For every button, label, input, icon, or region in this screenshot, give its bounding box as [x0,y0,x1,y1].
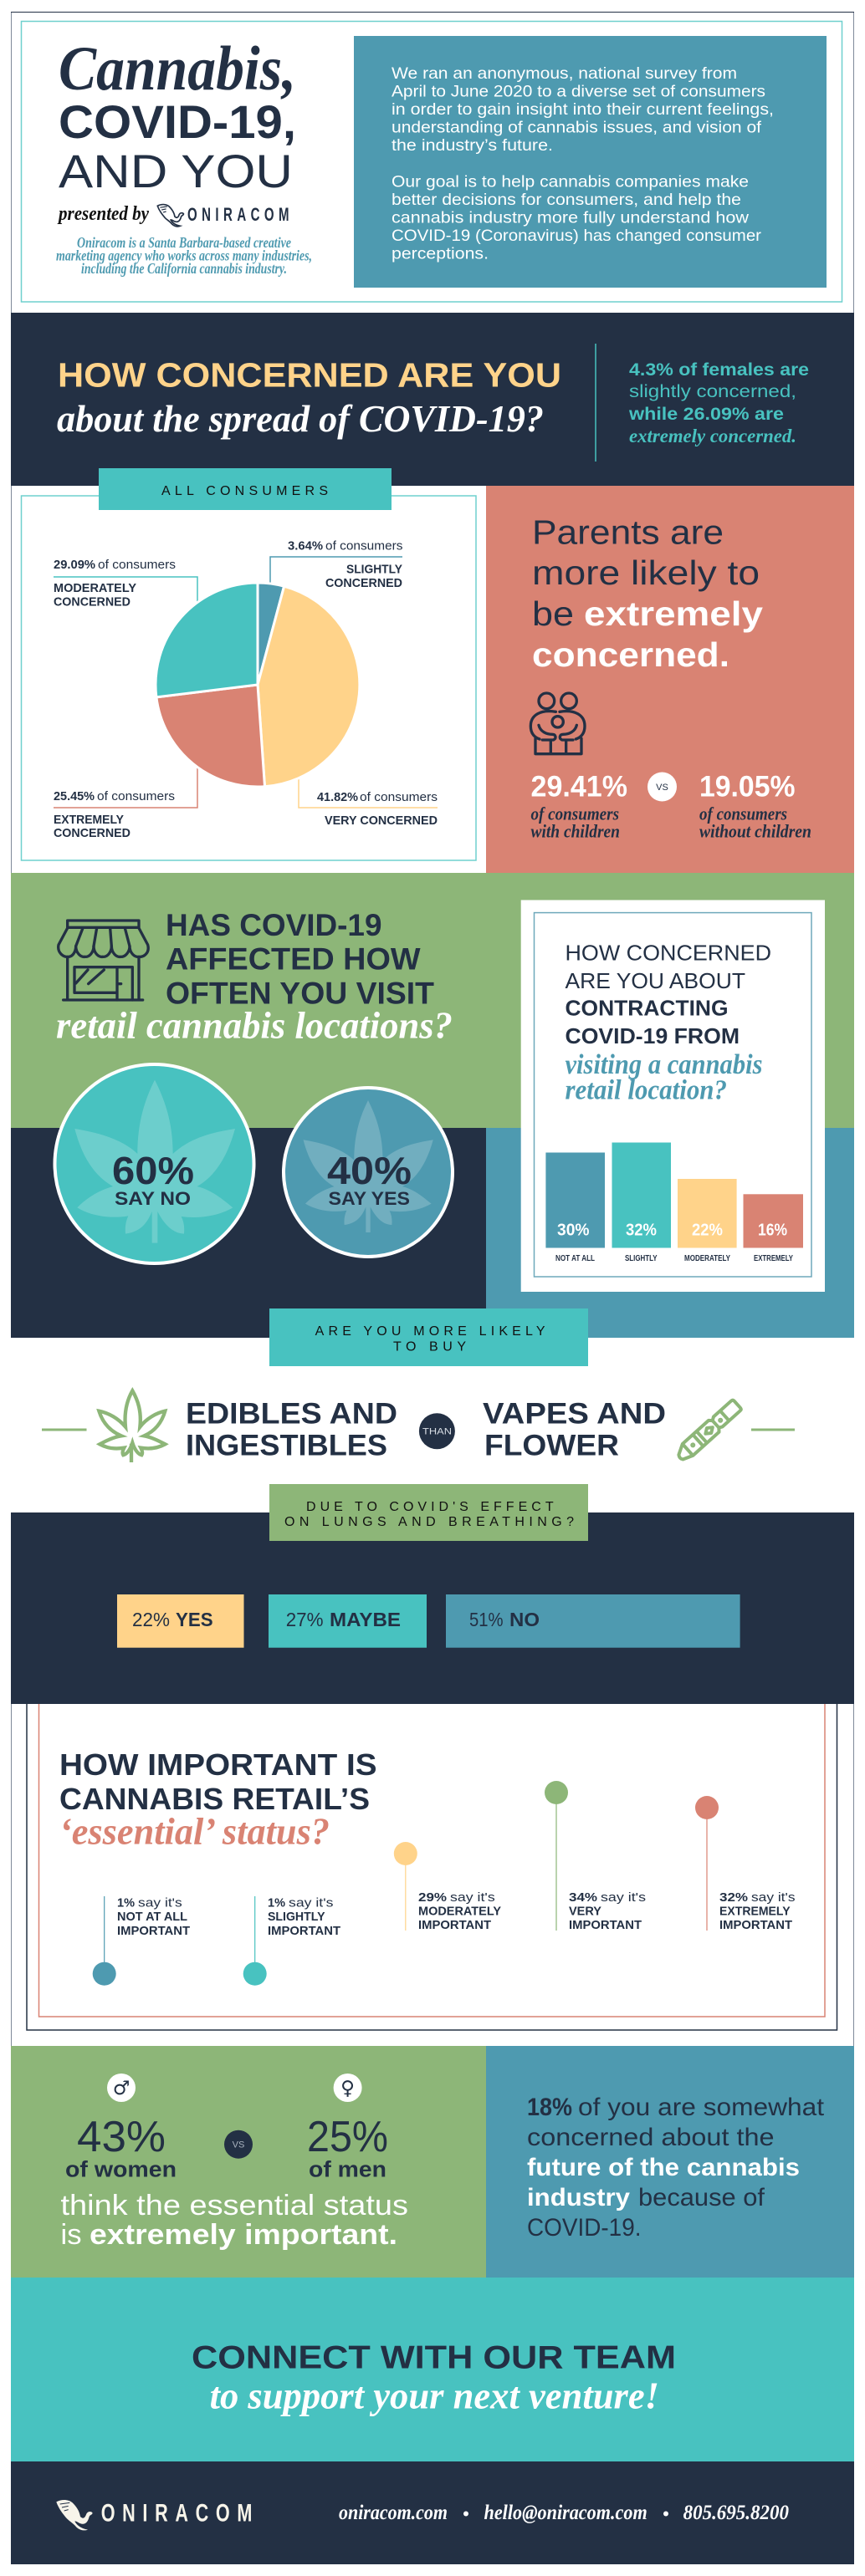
callout: extremely concerned [54,765,197,840]
essential status statement: is [60,2219,82,2251]
bar chart [545,1142,803,1263]
heading: HOW CONCERNED ARE YOU [58,356,561,395]
female concern callout: slightly concerned, [629,382,796,401]
female concern callout: 4.3% of females are [629,360,809,380]
lollipop: moderately important: IMPORTANT [418,1918,491,1932]
stat: men [307,2113,388,2182]
than badge: THAN [422,1426,452,1436]
bar chart: NOT AT ALL [555,1254,595,1263]
panel: future of the industry: of you are somewhat [578,2094,825,2121]
lollipop: extremely important: EXTREMELY [719,1905,791,1919]
callout: moderately concerned [54,558,197,610]
parents heading: more likely to [532,553,760,592]
lollipop: not at all important: say it's [138,1896,182,1910]
vs badge [224,2130,253,2159]
vs badge: VS [656,783,668,793]
lollipop: very important: VERY [569,1905,601,1919]
panel: women vs men [11,2046,486,2278]
callout: moderately concerned: MODERATELY [54,581,136,595]
lollipop: extremely important [695,1796,795,1932]
title: Cannabis, [59,34,296,104]
panel: call to action: CONNECT WITH OUR TEAM [192,2339,676,2376]
callout: very concerned: VERY CONCERNED [325,814,438,828]
callout: moderately concerned: CONCERNED [54,595,131,610]
footer logo: ONIRACOM [101,2500,259,2528]
card heading: retail location? [566,1075,727,1106]
icon: female symbol: ♀ [340,2078,355,2099]
bar: 51% no: 51% [469,1609,504,1630]
callout: moderately concerned: 29.09% [54,558,95,572]
lollipop: slightly important: IMPORTANT [268,1924,340,1938]
stat: with children: 29.41% [530,771,627,803]
stat: men: of men [309,2157,386,2182]
header panel [22,22,842,302]
option: edibles and ingestibles [186,1398,397,1462]
question tab: DUE TO COVID'S EFFECT [306,1500,554,1514]
card heading: visiting a cannabis [566,1049,763,1080]
vs badge [647,773,677,801]
heading: AFFECTED HOW [166,942,421,977]
panel: more likely to buy [11,1308,854,1512]
lollipop: not at all important: IMPORTANT [117,1924,190,1938]
lollipop: extremely important: IMPORTANT [719,1918,792,1932]
parents heading: concerned. [532,635,729,674]
presented by logo [57,203,294,227]
bar chart: EXTREMELY [754,1254,793,1263]
callout: extremely concerned: of consumers [97,789,175,803]
intro text box: in order to gain insight into their current feelings, [392,100,774,119]
panel: all consumers pie [22,468,476,860]
parents heading: be [532,594,574,633]
intro text box: cannabis industry more fully understand how [392,209,750,227]
question tab: ARE YOU MORE LIKELY [315,1324,545,1339]
question tab: ON LUNGS AND BREATHING? [284,1515,574,1529]
intro text box: better decisions for consumers, and help the [392,191,741,209]
heading: HAS COVID-19 [166,908,381,942]
lollipop: very important: 34% [569,1890,597,1905]
female concern callout [628,360,809,446]
essential status statement [60,2190,408,2251]
stat circle: 60% say no: SAY NO [115,1188,191,1209]
callout: slightly concerned: 3.64% [288,539,323,553]
parents heading: Parents are [532,513,724,552]
icon: joint [674,1399,743,1463]
icon: male symbol [107,2074,136,2102]
lollipop: very important: say it's [601,1890,646,1905]
intro text box: perceptions. [392,244,489,263]
stat circle: 40% say yes [284,1088,453,1257]
panel: future of the industry: concerned about the [527,2124,775,2151]
contact details: 805.695.8200 [683,2502,789,2524]
lollipop: moderately important [394,1842,501,1932]
panel: future of the industry: 18% [527,2094,572,2121]
contact details: oniracom.com [339,2502,448,2524]
callout: slightly concerned [270,539,403,590]
bar chart: MODERATELY [684,1254,730,1263]
lollipop: moderately important: MODERATELY [418,1905,501,1919]
title: AND YOU [59,145,293,197]
panel: call to action: to support your next venture! [210,2375,659,2417]
intro text box: the industry’s future. [392,136,553,155]
heading [56,908,453,1047]
panel: call to action [11,2278,854,2461]
bar chart: 16% [758,1221,787,1239]
lollipop: moderately important: 29% [418,1890,447,1905]
contact details [339,2502,789,2524]
callout: very concerned [299,778,438,828]
card heading: CONTRACTING [566,996,728,1021]
parents heading: extremely [584,594,763,633]
lollipop: slightly important: 1% [268,1896,285,1910]
stat circle: 60% say no [55,1064,254,1263]
lollipop: slightly important [243,1896,340,1986]
callout: slightly concerned: SLIGHTLY [346,563,402,577]
lollipop: very important: IMPORTANT [569,1918,642,1932]
panel: future of the industry: future of the cannabis [527,2154,800,2181]
parents heading [532,513,763,674]
panel: contracting covid card [521,900,825,1292]
bar: 27% maybe [269,1594,427,1648]
bar chart: 30% [557,1221,590,1239]
icon: female symbol [334,2074,362,2102]
panel: how concerned heading [11,313,854,486]
panel: parents [486,486,854,873]
presented by logo: presented by [57,203,149,225]
option: vapes and flower: FLOWER [484,1430,619,1462]
title [59,34,296,197]
stat: without children: of consumers [699,803,787,824]
callout: moderately concerned: of consumers [98,558,176,572]
callout: extremely concerned: CONCERNED [54,826,131,840]
panel: future of the industry: industry [527,2184,630,2211]
stat: men: 25% [307,2113,388,2161]
stat: with children: of consumers [530,803,619,824]
heading: about the spread of COVID-19? [57,397,544,440]
option: vapes and flower [483,1398,666,1462]
stat: women [65,2113,177,2182]
female concern callout: extremely concerned. [629,426,796,446]
panel: footer [11,2461,854,2564]
lollipop: moderately important: say it's [450,1890,495,1905]
heading: CANNABIS RETAIL’S [59,1782,370,1816]
than badge [419,1413,455,1449]
intro text box: COVID-19 (Coronavirus) has changed consumer [392,227,762,245]
callout: extremely concerned: EXTREMELY [54,813,124,827]
heading [57,356,561,440]
bar: 27% maybe: MAYBE [330,1609,401,1630]
bar: 51% no: NO [509,1609,540,1630]
all consumers tab: ALL CONSUMERS [161,484,328,498]
panel: future of the industry: because of [638,2184,765,2211]
bar: 22% yes: YES [176,1609,213,1630]
essential status statement: think the essential status [60,2190,408,2221]
panel: yes maybe no [11,1484,854,1704]
question tab [269,1308,588,1366]
contact details: hello@oniracom.com [484,2502,647,2524]
bar: 22% yes [117,1594,244,1648]
option: edibles and ingestibles: EDIBLES AND [186,1398,397,1431]
footer logo [56,2500,259,2530]
panel: essential status [27,1704,837,2030]
stat circle: 60% say no: 60% [112,1149,194,1192]
panel: future of the industry [486,2046,854,2278]
stat: with children: with children [530,821,620,842]
presented by logo: ONIRACOM [187,204,294,225]
option: edibles and ingestibles: INGESTIBLES [186,1430,387,1462]
lollipop: not at all important: NOT AT ALL [117,1910,187,1924]
heading: OFTEN YOU VISIT [166,976,434,1010]
female concern callout: while 26.09% are [628,405,784,424]
stat circle: 40% say yes: SAY YES [328,1188,410,1209]
agency description: marketing agency who works across many industries, [56,247,312,264]
heading: ‘essential’ status? [59,1811,330,1853]
lollipop: not at all important [93,1896,190,1986]
agency description [56,234,312,277]
all consumers tab [99,468,392,510]
option: vapes and flower: VAPES AND [483,1398,666,1431]
lollipop: slightly important: SLIGHTLY [268,1910,325,1924]
card heading: COVID-19 FROM [566,1023,740,1048]
icon: storefront [59,921,148,1000]
lollipop: extremely important: say it's [751,1890,795,1905]
intro text box: April to June 2020 to a diverse set of consumers [392,82,765,100]
icon: cannabis leaf [99,1390,165,1462]
stat: without children [699,771,811,842]
pie chart [156,583,360,787]
intro text box [354,36,827,288]
callout: very concerned: 41.82% [317,790,358,804]
lollipop: extremely important: 32% [719,1890,748,1905]
intro text box: We ran an anonymous, national survey from [392,64,737,83]
stat: without children: without children [699,821,811,842]
heading [59,1747,376,1853]
bar: 27% maybe: 27% [286,1609,323,1630]
icon: family [530,693,585,754]
stat: women: of women [65,2157,177,2182]
question tab: TO BUY [393,1340,466,1354]
stat: with children [530,771,627,842]
intro text box: understanding of cannabis issues, and vision of [392,119,762,137]
agency description: including the California cannabis industry. [81,260,287,277]
agency description: Oniracom is a Santa Barbara-based creative [77,234,291,251]
bar chart: 32% [626,1221,657,1239]
bar: 51% no [446,1594,740,1648]
bar chart: 22% [692,1221,723,1239]
question tab [269,1484,588,1541]
lollipop: very important [545,1781,646,1932]
stat: women: 43% [77,2113,166,2161]
bar: 22% yes: 22% [132,1609,170,1630]
card heading [566,941,771,1106]
panel: retail visits [11,873,854,1338]
callout: extremely concerned: 25.45% [54,789,95,803]
heading: HOW IMPORTANT IS [59,1747,376,1782]
icon: male symbol: ♂ [113,2078,130,2099]
lollipop: not at all important: 1% [117,1896,135,1910]
intro text box: Our goal is to help cannabis companies make [392,172,749,191]
callout: slightly concerned: CONCERNED [325,576,402,590]
callout: very concerned: of consumers [360,790,438,804]
bar chart: SLIGHTLY [625,1254,658,1263]
callout: slightly concerned: of consumers [325,539,403,553]
title: COVID-19, [59,95,296,148]
stat: without children: 19.05% [699,771,795,803]
card heading: ARE YOU ABOUT [566,968,745,993]
panel: future of the industry: COVID-19. [527,2214,641,2242]
card heading: HOW CONCERNED [566,941,771,966]
lollipop: slightly important: say it's [289,1896,333,1910]
heading: retail cannabis locations? [56,1005,453,1047]
stat circle: 40% say yes: 40% [327,1149,412,1192]
essential status statement: extremely important. [90,2219,397,2251]
vs badge: VS [233,2140,244,2150]
